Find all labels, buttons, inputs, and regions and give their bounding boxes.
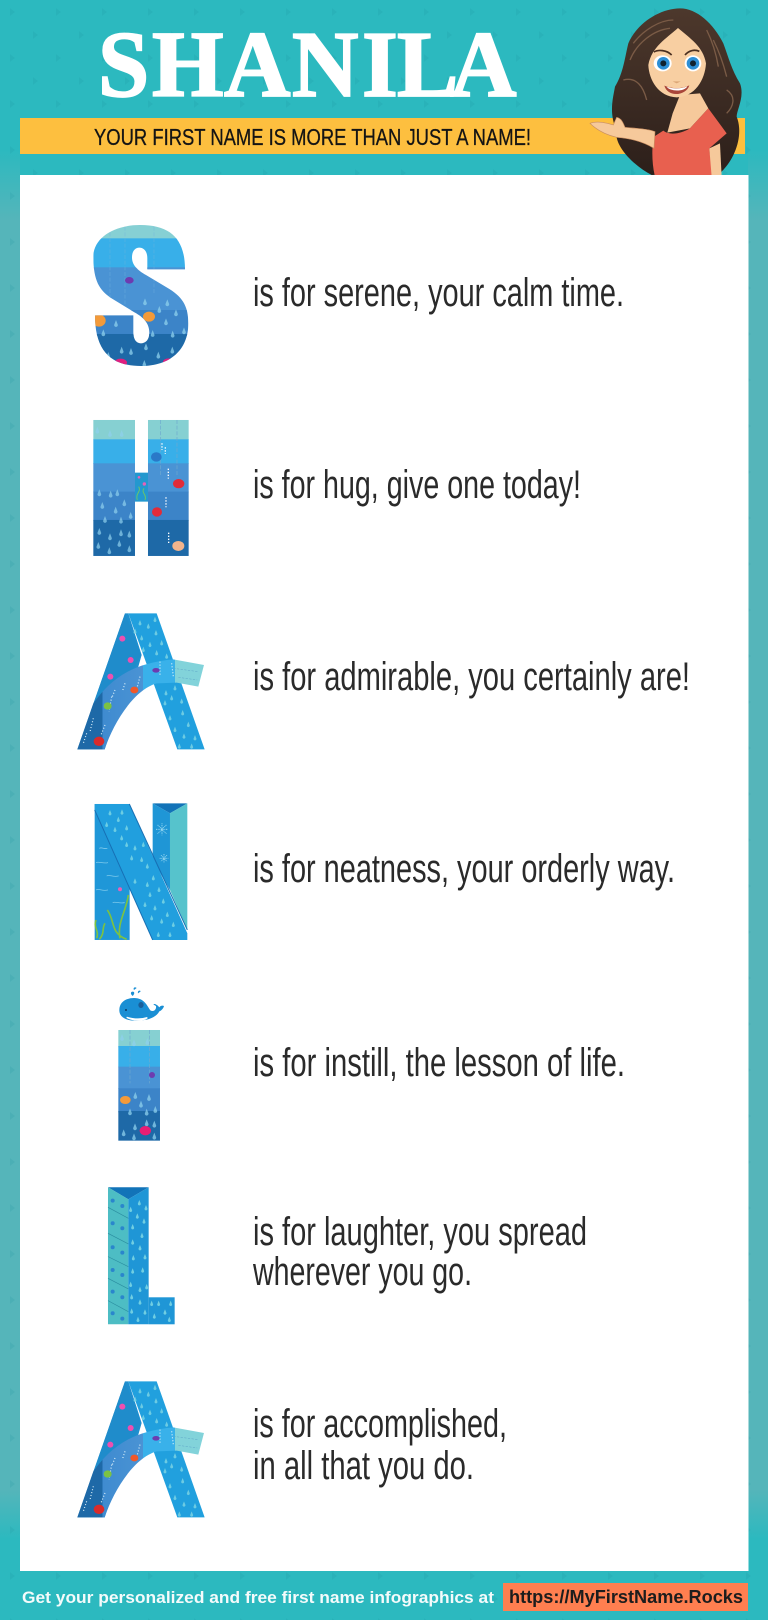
text: L lines: wherever you go. xyxy=(252,1250,472,1294)
text: L lines xyxy=(252,1210,587,1294)
footer: Get your personalized and free first name infographics at xyxy=(22,1588,494,1607)
text: A lines: is for accomplished, xyxy=(253,1402,507,1446)
subtitle band: YOUR FIRST NAME IS MORE THAN JUST A NAME! xyxy=(94,124,531,150)
letter A xyxy=(77,613,205,749)
letter N xyxy=(95,803,187,940)
character: woman xyxy=(590,8,742,177)
subtitle band xyxy=(20,118,745,154)
text: S line: is for serene, your calm time. xyxy=(253,271,624,315)
title: SHANILA xyxy=(98,13,516,117)
icon: whale xyxy=(119,987,164,1021)
letter A (second) xyxy=(77,1381,205,1517)
letter I xyxy=(118,1030,160,1141)
text: H line: is for hug, give one today! xyxy=(253,463,581,507)
footer: https://MyFirstName.Rocks xyxy=(509,1587,743,1607)
text: A lines xyxy=(253,1402,507,1488)
letter H xyxy=(93,420,189,556)
footer xyxy=(22,1583,748,1611)
text: A lines: in all that you do. xyxy=(253,1444,474,1488)
text: L lines: is for laughter, you spread xyxy=(253,1210,587,1254)
letter S xyxy=(90,223,193,367)
text: I line: is for instill, the lesson of life. xyxy=(253,1041,625,1085)
letter L xyxy=(108,1187,175,1324)
